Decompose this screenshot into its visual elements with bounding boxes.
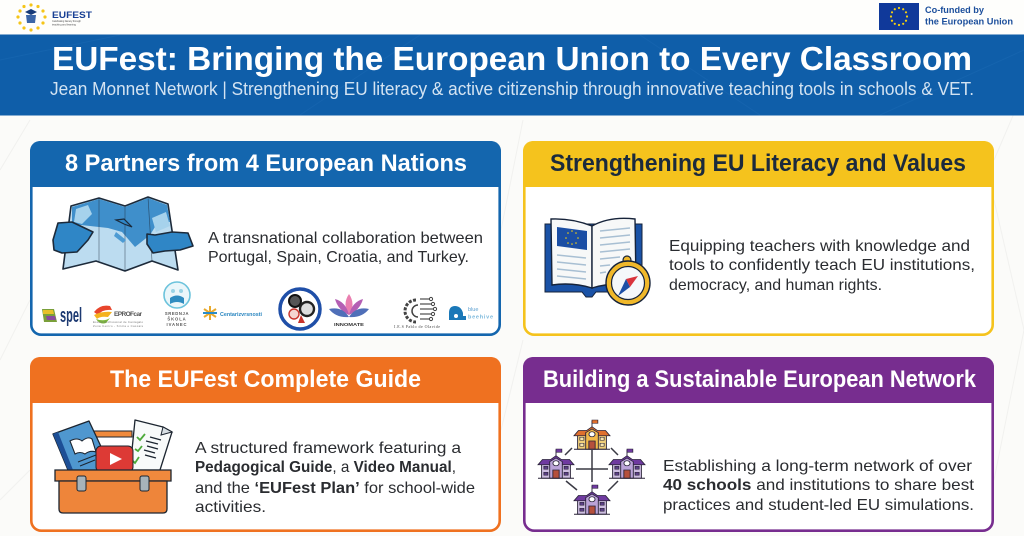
logo: EPROFcar (93, 306, 144, 328)
subtitle: Jean Monnet Network | Strengthening EU literacy & active citizenship through innovative teaching tools in schools & VET. (50, 79, 974, 99)
logo: INNOMATE: INNOMATE (334, 322, 364, 327)
panel: sustainable network (523, 357, 994, 531)
panel: EU literacy (523, 141, 994, 335)
text: transnational collaboration: A transnational collaboration between (208, 230, 483, 247)
title: EUFest: Bringing the European Union to Every Classroom (52, 40, 972, 77)
heading: Building a Sustainable European Network (543, 366, 977, 393)
text: long-term network: 40 schools and institutions to share best (663, 477, 975, 494)
logo: EUFEST: Celebrating literacy through (52, 19, 82, 23)
text: structured framework: Pedagogical Guide, a Video Manual, (195, 459, 456, 476)
text: structured framework (195, 440, 475, 516)
panel: complete guide (30, 357, 501, 531)
icon: toolbox (53, 420, 172, 513)
logo: EUFEST: teaching and learning (52, 22, 77, 26)
logo: Centar izvrsnosti (203, 306, 262, 320)
text: structured framework: A structured framework featuring a (195, 440, 461, 457)
header banner (0, 34, 1024, 116)
logo: IES Pablo de Olavide: I.E.S Pablo de Olavide (394, 324, 440, 329)
logo: INNOMATE (329, 294, 369, 327)
text: long-term network: practices and student-led EU simulations. (663, 497, 974, 514)
panel: 8 partners (30, 141, 501, 335)
heading: The EUFest Complete Guide (110, 366, 421, 393)
logo: EUFEST: EUFEST (52, 10, 92, 21)
icon: open book and compass (545, 218, 650, 305)
logo: co-funded by the EU: Co-funded by (925, 5, 984, 15)
logo: EUFEST (16, 3, 92, 32)
text: long-term network (663, 458, 975, 514)
logo: spel (42, 305, 82, 327)
text: structured framework: and the ‘EUFest Plan’ for school-wide (195, 480, 475, 497)
heading: 8 Partners from 4 European Nations (65, 150, 467, 177)
logo: blue beehive: beehive (468, 314, 493, 320)
text: transnational collaboration (208, 230, 483, 266)
icon: map of Europe (53, 197, 193, 271)
logo: blue beehive (449, 306, 493, 320)
logo: EPROFcar: EPROFcar (114, 311, 142, 318)
text: transnational collaboration: Portugal, Spain, Croatia, and Turkey. (208, 249, 469, 266)
logo: IES Pablo de Olavide (394, 297, 440, 329)
logo: Centar izvrsnosti: Centarizvrsnosti (220, 312, 262, 318)
text: equipping teachers: Equipping teachers with knowledge and (669, 238, 970, 255)
icon: school network (538, 420, 645, 514)
logo: co-funded by the EU (879, 3, 1013, 30)
logo: EPROFcar: Zona Centro - Sintra e Cascais (93, 324, 144, 328)
heading: Strengthening EU Literacy and Values (550, 150, 966, 177)
logo: Srednja skola Ivanec: IVANEC (167, 322, 187, 327)
logo: Srednja skola Ivanec (164, 282, 190, 327)
logo: EPROFcar: Escola Profissional de Cantagalo (93, 320, 143, 324)
text: equipping teachers: tools to confidently teach EU institutions, (669, 257, 975, 274)
logo: blue beehive: blue (468, 307, 478, 313)
text: equipping teachers: democracy, and human rights. (669, 277, 882, 294)
logo: Srednja skola Ivanec: ŠKOLA (167, 316, 187, 322)
text: structured framework: activities. (195, 499, 266, 516)
logo: Srednja skola Ivanec: SREDNJA (165, 311, 189, 316)
logo: co-funded by the EU: the European Union (925, 16, 1013, 26)
text: long-term network: Establishing a long-term network of over (663, 458, 973, 475)
logo: spel: spel (60, 305, 82, 327)
logo: gears seal (280, 289, 320, 329)
text: equipping teachers (669, 238, 975, 294)
